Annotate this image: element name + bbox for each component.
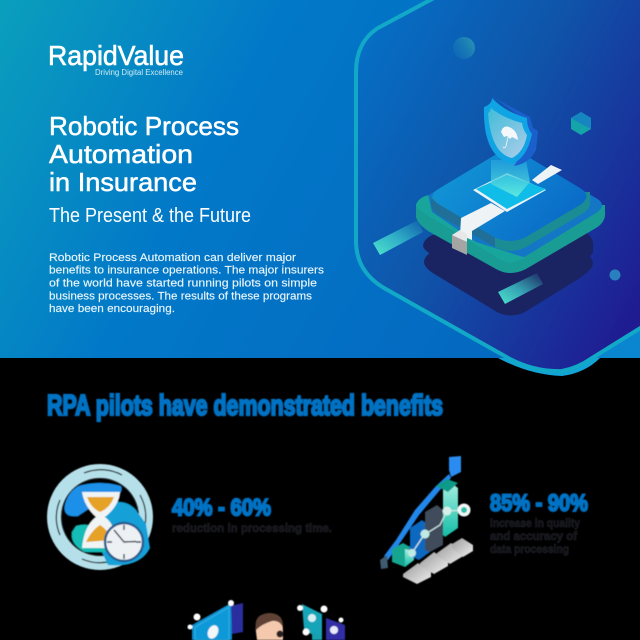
- centre plate: [473, 173, 546, 212]
- grey block: [452, 230, 467, 242]
- hourglass body: [82, 492, 120, 548]
- nodes: [412, 510, 463, 553]
- icon: hourglass and clock: [54, 470, 150, 565]
- intro paragraph: business processes. The results of these programs: [49, 290, 313, 302]
- white strip: [460, 203, 505, 240]
- decorative sphere small: [610, 270, 620, 280]
- streak bottom: [498, 273, 543, 304]
- logo: Driving Digital Excellence: [95, 68, 184, 77]
- stat: left: 40% - 60%: [172, 494, 271, 522]
- light corner at lower right of hero: [588, 326, 640, 358]
- arrow trend: [384, 474, 451, 560]
- hexagon panel: [356, 0, 640, 371]
- shield with umbrella icon: [484, 97, 538, 166]
- upper layer: [431, 192, 590, 251]
- icon: isometric bar chart: [380, 456, 473, 584]
- intro paragraph: benefits to insurance operations. The major insurers: [49, 264, 325, 276]
- stat: right: [490, 490, 588, 556]
- hologram beam: [491, 160, 530, 197]
- title: Automation: [49, 139, 193, 169]
- isometric platform: [416, 152, 605, 273]
- icon: person head: [256, 613, 284, 640]
- blue clouds: [65, 483, 122, 516]
- section heading: RPA pilots have demonstrated benefits: [47, 390, 443, 422]
- title: Robotic Process: [49, 111, 239, 141]
- stat: right: Increase in quality: [490, 516, 580, 530]
- intro paragraph: of the world have started running pilots on simple: [49, 278, 317, 290]
- stat: left: reduction in processing time.: [172, 521, 332, 535]
- title: in Insurance: [49, 167, 197, 197]
- intro paragraph: Robotic Process Automation can deliver major: [49, 252, 296, 264]
- streak left: [373, 220, 423, 255]
- intro paragraph: have been encouraging.: [49, 303, 175, 315]
- stat: right: and accuracy of: [490, 529, 578, 543]
- dark inner disc: [62, 479, 138, 555]
- icon: film gears: [297, 604, 345, 640]
- stat: right: data processing: [490, 542, 569, 556]
- step tiles: [403, 563, 431, 584]
- decorative sphere large: [453, 37, 475, 59]
- logo: RapidValue: [48, 40, 184, 71]
- intro paragraph: [49, 252, 325, 315]
- hexagon rim below hero edge: [498, 358, 600, 376]
- hero background: [0, 0, 640, 358]
- clock: [105, 523, 143, 561]
- title: [49, 111, 239, 197]
- lower layer: [416, 205, 605, 273]
- stat: right: 85% - 90%: [490, 490, 588, 517]
- subtitle: The Present & the Future: [49, 205, 251, 227]
- decorative hexagon cube: [571, 112, 591, 135]
- stat: left: [172, 494, 332, 535]
- icon: screen tablet: [188, 600, 243, 640]
- bars: [392, 543, 414, 567]
- platform shadows: [423, 232, 593, 316]
